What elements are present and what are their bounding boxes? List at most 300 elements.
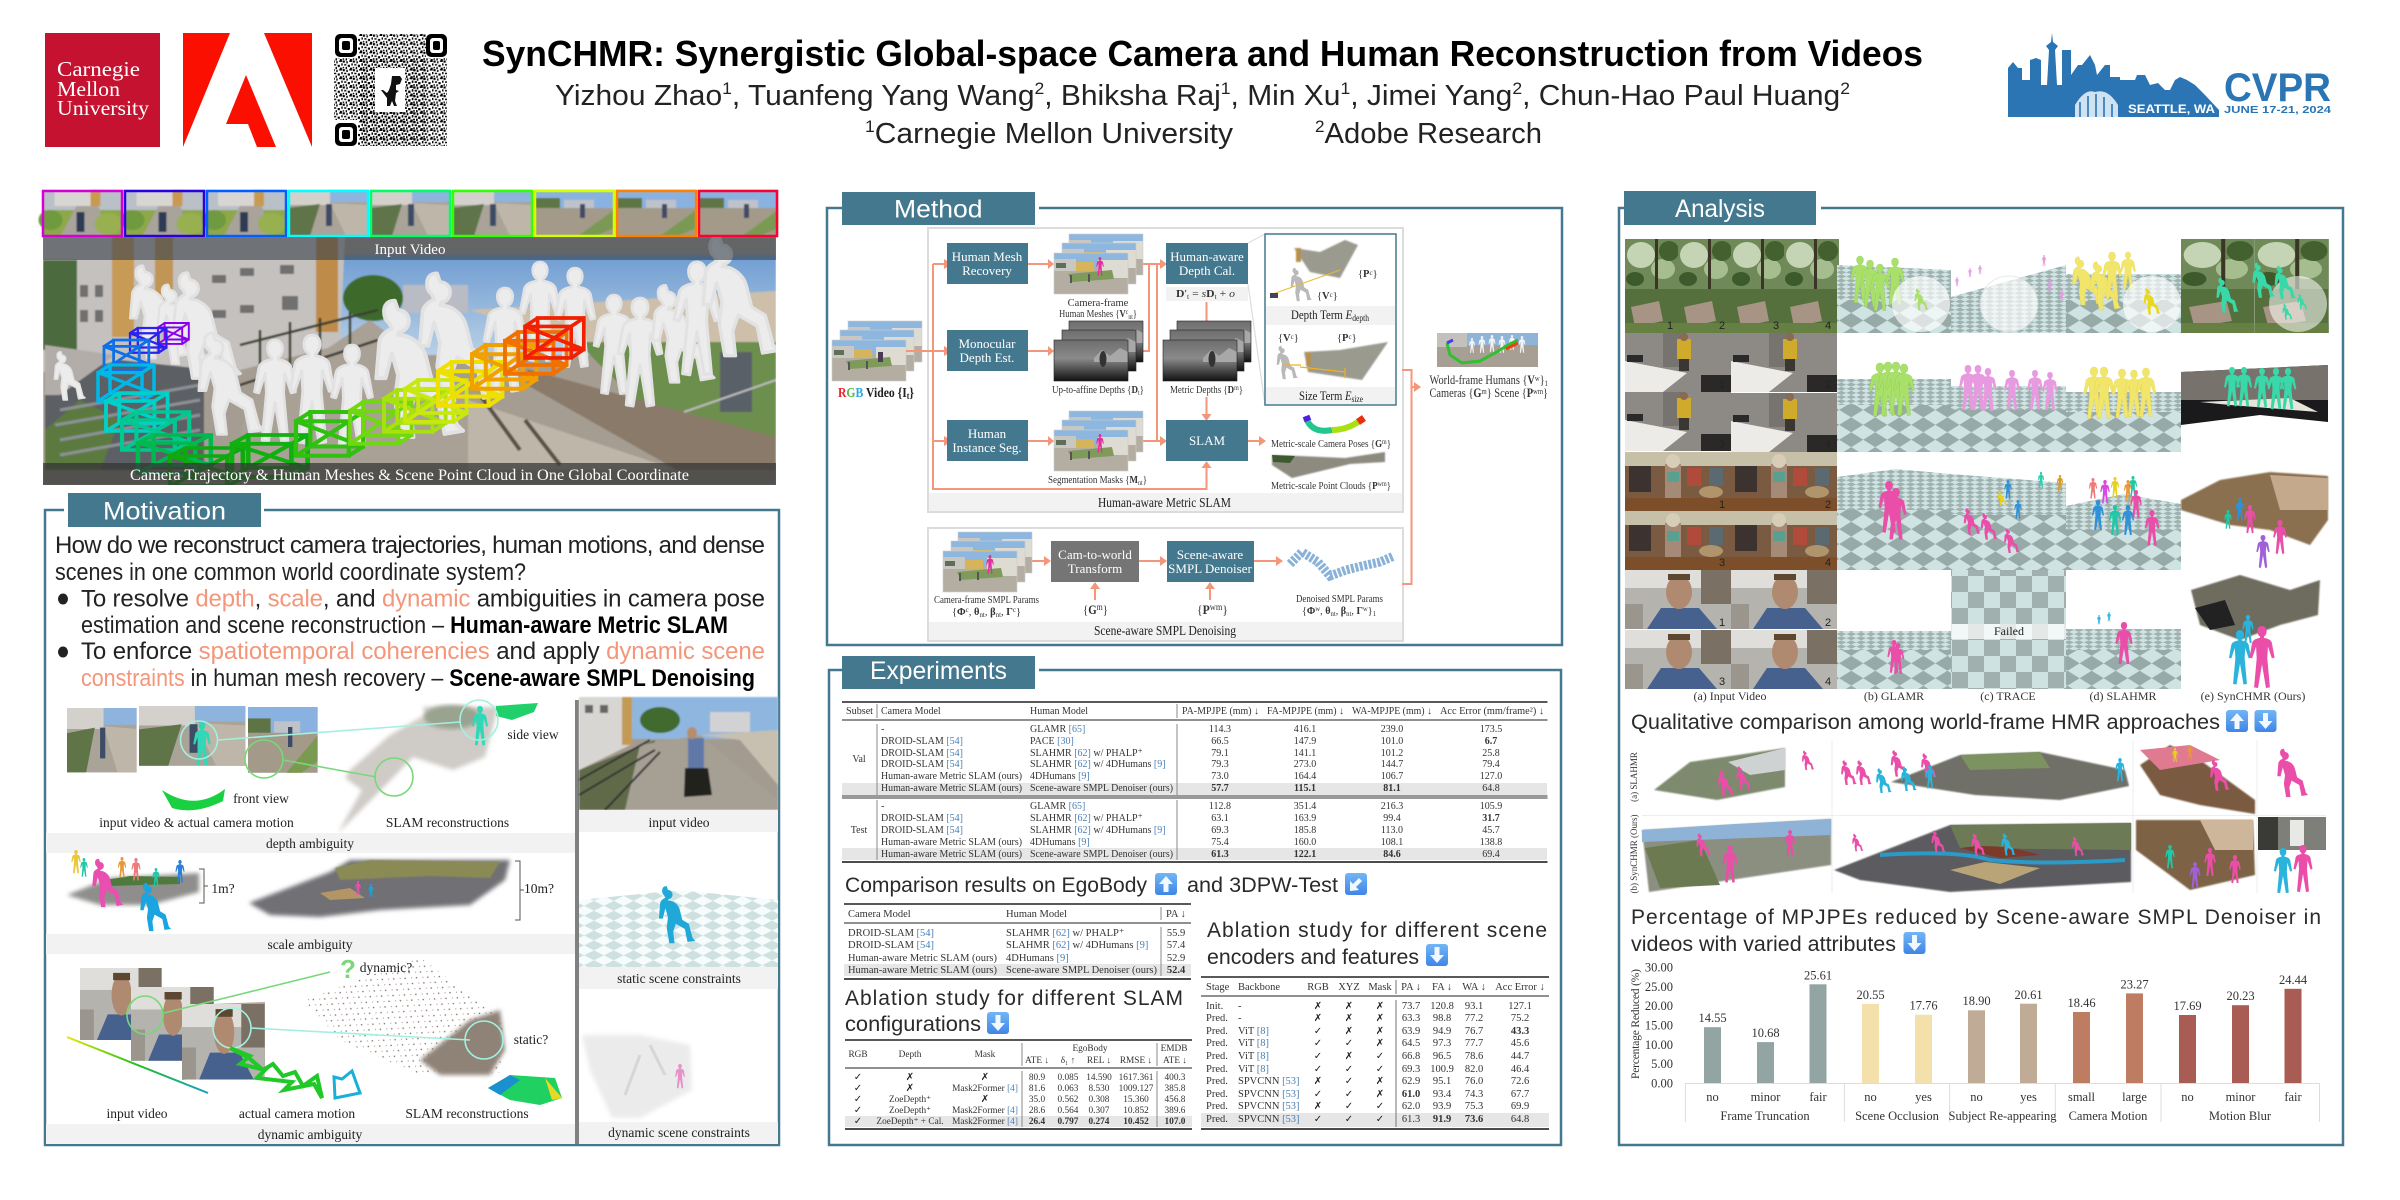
table: ablation scene encoders and features [1201,977,1549,1129]
table: EgoBody and 3DPW comparison: Subset [846,706,873,717]
camera and scene inputs: } [1103,603,1108,617]
table: ablation scene encoders and features: 77.2 [1465,1013,1483,1024]
table: ablation SLAM configurations: ✓ [854,1072,862,1083]
dynamic ambiguity illustration: dynamic? [360,960,412,975]
table: ablation scene encoders and features: ViT [8] [1238,1026,1269,1037]
bar chart: percentage of MPJPEs reduced: 5.00 [1651,1057,1673,1071]
bar chart: percentage of MPJPEs reduced: 14.55 [1698,1011,1727,1025]
table: ablation scene encoders and features: 97.3 [1433,1038,1451,1049]
table: ablation SLAM configurations: Mask2Former [4] [952,1084,1018,1094]
SMPL params stack: Camera-frame SMPL Params [934,595,1039,606]
table: ablation scene encoders and features: Pred. [1206,1013,1228,1024]
SMPL params stack: β [990,607,996,618]
table: SLAM models on PA: Scene-aware SMPL Denoiser (ours) [1006,965,1157,976]
table: SLAM models on PA: Human Model [1006,909,1067,920]
input video column: 3 [1719,557,1725,569]
table: ablation scene encoders and features: ✓ [1345,1114,1353,1125]
authors: , Chun-Hao Paul Huang [1522,80,1840,112]
bar chart: percentage of MPJPEs reduced [1630,960,2320,1123]
authors: Yizhou Zhao [555,80,717,112]
table: ablation scene encoders and features: ✗ [1314,1013,1322,1024]
table: EgoBody and 3DPW comparison: 216.3 [1381,801,1403,812]
table: EgoBody and 3DPW comparison: 351.4 [1294,801,1316,812]
denoised SMPL params: nt [1330,610,1336,618]
caption: scale ambiguity [46,934,575,954]
table: ablation scene encoders and features: 69.9 [1511,1101,1529,1112]
bar chart: percentage of MPJPEs reduced: Scene Occlusion [1855,1109,1940,1123]
block: Scene-aware SMPL Denoising: Scene-aware SMPL Denoising [1094,623,1236,638]
hero: camera trajectory, human meshes and scene point cloud: Camera Trajectory & Human Meshes & Scene Point Cloud in One Global Coordinate [130,467,689,484]
bar chart: percentage of MPJPEs reduced: 15.00 [1645,1018,1673,1032]
heading: ablation scene encoders [1207,919,1547,969]
table: ablation SLAM configurations: ATE ↓ [1025,1056,1049,1066]
table: ablation scene encoders and features: 93.9 [1433,1101,1451,1112]
denoised SMPL params: , [1351,606,1356,617]
bar chart: percentage of MPJPEs reduced: yes [2020,1090,2037,1104]
depth and size term detail [1248,234,1396,405]
table: ablation scene encoders and features: 64.5 [1402,1038,1420,1049]
input video column: 1 [1719,499,1725,511]
table: ablation scene encoders and features: 46.4 [1511,1064,1530,1075]
table: SLAM models on PA: SLAHMR [62] w/ 4DHumans [9] [1006,940,1148,951]
table: SLAM models on PA: 55.9 [1167,928,1185,939]
bar chart: percentage of MPJPEs reduced: yes [1915,1090,1932,1104]
table: ablation SLAM configurations: 10.852 [1123,1106,1149,1116]
depth and size term detail: size [1351,394,1363,404]
table: ablation SLAM configurations: Depth [899,1050,922,1060]
table: ablation scene encoders and features: 94.9 [1433,1026,1451,1037]
table: ablation SLAM configurations: ✗ [906,1072,914,1083]
table: EgoBody and 3DPW comparison: 61.3 [1211,849,1229,860]
table: ablation scene encoders and features: 44.7 [1511,1051,1529,1062]
affiliations: 2 [1315,117,1325,136]
table: SLAM models on PA: 4DHumans [9] [1006,953,1069,964]
output: world-frame reconstruction: World-frame Humans {V [1430,373,1548,387]
table: ablation scene encoders and features: ✓ [1376,1051,1384,1062]
table: ablation scene encoders and features: WA ↓ [1462,982,1486,993]
heading: ablation scene encoders: Ablation study for different scene [1207,919,1547,942]
depth and size term detail: Size Term E [1299,388,1353,403]
table: ablation scene encoders and features: SPVCNN [53] [1238,1089,1300,1100]
input video column: 4 [1825,557,1831,569]
heading: ablation SLAM: Ablation study for different SLAM [845,987,1183,1010]
image stack: metric depths: } [1239,385,1243,396]
output: world-frame reconstruction [1430,333,1548,400]
depth and size term detail: } [1352,333,1357,344]
table: ablation scene encoders and features: 62.0 [1402,1101,1420,1112]
bar chart: percentage of MPJPEs reduced: 17.69 [2173,999,2202,1013]
affiliations: Adobe Research [1325,118,1542,150]
table: ablation SLAM configurations: ✗ [981,1072,989,1083]
arrows [906,264,1419,600]
heading: qualitative comparison: Qualitative comparison among world-frame HMR approaches [1631,711,2220,734]
table: ablation scene encoders and features: ✓ [1345,1064,1353,1075]
table: EgoBody and 3DPW comparison: Human-aware Metric SLAM (ours) [881,783,1022,794]
image stack: depths: } [1140,385,1144,396]
table: ablation scene encoders and features: SPVCNN [53] [1238,1114,1300,1125]
step: Human Mesh Recovery: Recovery [962,263,1012,278]
motivation text: To enforce spatiotemporal coherencies and apply dynamic scene [81,638,765,665]
table: ablation scene encoders and features: 120.8 [1430,1001,1454,1012]
table: ablation SLAM configurations: 0.562 [1058,1095,1079,1105]
table: EgoBody and 3DPW comparison: DROID-SLAM [54] [881,736,963,747]
table: EgoBody and 3DPW comparison: 75.4 [1211,837,1229,848]
table: ablation SLAM configurations: 80.9 [1029,1073,1045,1083]
table: ablation scene encoders and features: Pred. [1206,1076,1228,1087]
denoised SMPL params: Γ [1356,606,1363,617]
table: ablation SLAM configurations: 456.8 [1165,1095,1186,1105]
input video column: 1 [1719,379,1725,391]
table: EgoBody and 3DPW comparison: SLAHMR [62] w/ PHALP⁺ [1030,748,1143,759]
table: ablation SLAM configurations: ZoeDepth⁺ + Cal. [876,1117,944,1127]
table: ablation scene encoders and features: 78.6 [1465,1051,1483,1062]
table: ablation scene encoders and features: ✗ [1376,1001,1384,1012]
table: ablation SLAM configurations [845,1040,1192,1129]
global reconstruction comparison: (a) SLAHMR [1629,752,1639,802]
table: ablation scene encoders and features: SPVCNN [53] [1238,1076,1300,1087]
SMPL params stack: } [1016,607,1021,618]
heading: percentage reduced: Percentage of MPJPEs reduced by Scene-aware SMPL Denoiser in [1631,906,2321,929]
table: ablation scene encoders and features: 98.8 [1433,1013,1451,1024]
depth and size term detail: c [1348,333,1352,341]
table: ablation scene encoders and features: 95.1 [1433,1076,1451,1087]
depth and size term detail: depth [1352,313,1369,323]
input video photo and caption [579,697,778,832]
RGB video input: } [909,385,914,400]
image stack: depths: t [1138,389,1140,397]
table: ablation scene encoders and features: ✗ [1345,1001,1353,1012]
table: ablation scene encoders and features: 91.9 [1433,1114,1451,1125]
SMPL params stack: , [969,607,974,618]
table: ablation scene encoders and features: ✗ [1376,1038,1384,1049]
table: ablation scene encoders and features: 63.9 [1402,1026,1420,1037]
bar chart: percentage of MPJPEs reduced: 18.46 [2067,996,2096,1010]
table: ablation SLAM configurations: 28.6 [1029,1106,1045,1116]
SMPL params stack: θ [974,607,980,618]
image stack: segmentation masks: nt [1138,479,1143,487]
bar chart: percentage of MPJPEs reduced: Subject Re-appearing [1949,1109,2057,1123]
table: EgoBody and 3DPW comparison: Human-aware Metric SLAM (ours) [881,771,1022,782]
table: EgoBody and 3DPW comparison: DROID-SLAM [54] [881,759,963,770]
dynamic scene constraints [579,1035,778,1144]
logo: CVPR 2024 Seattle: JUNE 17-21, 2024 [2224,104,2331,116]
step: Human Instance Seg.: Instance Seg. [952,440,1022,455]
dynamic ambiguity illustration: ? [340,954,356,984]
table: ablation scene encoders and features: ✓ [1376,1064,1384,1075]
depth calibration formula: t [1187,293,1189,301]
authors: 2 [1512,79,1522,98]
table: ablation scene encoders and features: 66.8 [1402,1051,1420,1062]
panel: Experiments [829,656,1561,1145]
block: Scene-aware SMPL Denoising [928,528,1403,641]
table: ablation scene encoders and features: ✓ [1345,1101,1353,1112]
motivation text: constraints in human mesh recovery – Scene-aware SMPL Denoising [81,665,755,692]
hero: camera trajectory, human meshes and scene point cloud: Input Video [375,242,445,258]
table: ablation scene encoders and features: 45.6 [1511,1038,1529,1049]
camera and scene inputs: {G [1083,603,1098,617]
table: ablation SLAM configurations: ZoeDepth⁺ [889,1106,931,1116]
table: ablation scene encoders and features: Pred. [1206,1051,1228,1062]
image stack: segmentation masks: Segmentation Masks {M [1048,475,1143,486]
table: SLAM models on PA: Camera Model [848,909,911,920]
table: EgoBody and 3DPW comparison: 138.8 [1480,837,1502,848]
table: ablation scene encoders and features: ✓ [1314,1064,1322,1075]
table: EgoBody and 3DPW comparison: 81.1 [1383,783,1401,794]
table: EgoBody and 3DPW comparison: Human Model [1030,706,1088,717]
caption: depth ambiguity: depth ambiguity [266,836,354,851]
table: ablation scene encoders and features: Backbone [1238,982,1280,993]
table: SLAM models on PA [844,904,1191,979]
heading: Method [842,192,1035,225]
table: ablation scene encoders and features: 43.3 [1511,1026,1529,1037]
table: ablation SLAM configurations: ✓ [854,1105,862,1116]
denoised SMPL params: , [1336,606,1341,617]
authors: 2 [1840,79,1850,98]
table: SLAM models on PA: Human-aware Metric SLAM (ours) [848,953,997,964]
table: ablation SLAM configurations: 81.6 [1029,1084,1045,1094]
table: ablation SLAM configurations: 0.063 [1058,1084,1079,1094]
table: ablation scene encoders and features: Pred. [1206,1114,1228,1125]
table: ablation SLAM configurations: ✗ [906,1083,914,1094]
table: ablation scene encoders and features: PA ↓ [1401,982,1421,993]
depth calibration formula: sD [1202,289,1214,300]
table: ablation scene encoders and features: - [1238,1001,1242,1012]
table: ablation scene encoders and features: 96.5 [1433,1051,1451,1062]
camera and scene inputs: wm [1210,602,1222,612]
table: SLAM models on PA: DROID-SLAM [54] [848,928,934,939]
denoised SMPL params: w [1363,605,1369,613]
camera and scene inputs [1083,602,1228,617]
caption: depth ambiguity [46,833,575,853]
dynamic scene constraints: dynamic scene constraints [608,1125,750,1140]
SMPL params stack: {Φ [952,607,966,618]
denoised SMPL params: {Φ [1302,606,1316,617]
logo: CVPR 2024 Seattle [2008,33,2331,117]
table: EgoBody and 3DPW comparison: 45.7 [1482,825,1500,836]
table: ablation scene encoders and features: 100.9 [1430,1064,1454,1075]
table: ablation SLAM configurations: 0.307 [1089,1106,1110,1116]
table: ablation SLAM configurations: 14.590 [1086,1073,1112,1083]
table: EgoBody and 3DPW comparison: 69.4 [1482,849,1500,860]
table: ablation scene encoders and features: Stage [1206,982,1230,993]
image stack: metric depths: m [1234,384,1239,392]
table: ablation scene encoders and features: ✗ [1345,1013,1353,1024]
table: EgoBody and 3DPW comparison: PACE [30] [1030,736,1074,747]
output: world-frame reconstruction: m [1482,387,1487,396]
table: ablation SLAM configurations: 0.797 [1058,1117,1079,1127]
table: ablation SLAM configurations: 1009.127 [1119,1084,1154,1094]
table: ablation scene encoders and features: ✗ [1376,1026,1384,1037]
table: ablation SLAM configurations: REL ↓ [1087,1056,1111,1066]
column captions: (d) SLAHMR [2089,689,2157,703]
table: ablation scene encoders and features: FA ↓ [1432,982,1452,993]
global reconstruction comparison [1629,740,2326,894]
table: ablation SLAM configurations: 1617.361 [1119,1073,1154,1083]
table: EgoBody and 3DPW comparison: 101.0 [1381,736,1403,747]
heading: Analysis: Analysis [1675,195,1765,223]
qualitative comparison grid [1625,239,2329,703]
depth calibration formula: = [1189,289,1202,300]
input video frame strip [38,190,778,236]
image stack: human meshes [1054,234,1143,321]
scale ambiguity illustration: 1m? [211,881,235,896]
table: ablation scene encoders and features: ✓ [1314,1114,1322,1125]
image stack: segmentation masks: } [1143,475,1147,486]
table: EgoBody and 3DPW comparison: 108.1 [1381,837,1403,848]
depth ambiguity illustration: input video & actual camera motion [99,815,294,830]
table: SLAM models on PA: 52.9 [1167,953,1185,964]
image stack: segmentation masks [1048,411,1147,487]
depth and size term detail: c [1369,269,1373,277]
logo: CVPR 2024 Seattle: CVPR [2224,66,2331,110]
logo: Carnegie Mellon University [45,33,160,147]
panel: Analysis [1619,191,2343,1145]
step: Human-aware Depth Cal.: Depth Cal. [1179,263,1235,278]
scale ambiguity illustration [67,850,554,931]
heading: comparison results [845,873,1367,897]
table: EgoBody and 3DPW comparison: Val [852,754,866,765]
QR code [334,34,447,146]
table: EgoBody and 3DPW comparison: 114.3 [1209,724,1231,735]
dynamic ambiguity illustration: input video [106,1106,168,1121]
table: ablation SLAM configurations: EMDB [1161,1044,1187,1054]
metric-scale camera poses: } [1387,439,1391,450]
heading: Analysis [1624,191,1816,225]
table: ablation scene encoders and features: 72.6 [1511,1076,1529,1087]
scale ambiguity illustration: 10m? [524,881,554,896]
table: EgoBody and 3DPW comparison: 122.1 [1294,849,1316,860]
bar chart: percentage of MPJPEs reduced: small [2068,1090,2096,1104]
arrowheads [944,259,1421,589]
table: ablation scene encoders and features: ✓ [1314,1026,1322,1037]
authors: 1 [722,79,732,98]
bar chart: percentage of MPJPEs reduced: 20.55 [1856,988,1885,1002]
block: Human-aware Metric SLAM: Human-aware Metric SLAM [1098,495,1231,510]
step: Human Instance Seg. [947,420,1028,461]
RGB video input: t [907,391,909,401]
table: ablation SLAM configurations: 400.3 [1165,1073,1186,1083]
table: EgoBody and 3DPW comparison: - [881,724,884,735]
authors: , Jimei Yang [1350,80,1512,112]
caption: scale ambiguity: scale ambiguity [267,937,353,952]
motivation text: To resolve depth, scale, and dynamic ambiguities in camera pose [81,586,765,612]
metric-scale camera poses: Metric-scale Camera Poses {G [1271,439,1393,450]
input video column: 4 [1825,439,1831,451]
dynamic ambiguity illustration: actual camera motion [239,1106,355,1121]
static scene constraints [579,886,778,989]
table: EgoBody and 3DPW comparison: Test [851,825,867,836]
authors: 1 [1221,79,1231,98]
table: EgoBody and 3DPW comparison: DROID-SLAM [54] [881,825,963,836]
table: EgoBody and 3DPW comparison: 79.1 [1211,748,1229,759]
TRACE column: Failed [1994,624,2024,638]
denoised SMPL params: θ [1325,606,1331,617]
motivation text: estimation and scene reconstruction – Human-aware Metric SLAM [81,612,728,639]
bar chart: percentage of MPJPEs reduced: fair [2284,1090,2303,1104]
table: SLAM models on PA: DROID-SLAM [54] [848,940,934,951]
depth and size term detail: {P [1358,269,1369,280]
table: EgoBody and 3DPW comparison: 63.1 [1211,813,1229,824]
camera and scene inputs: } [1222,603,1228,617]
metric-scale camera poses: m [1382,438,1387,446]
step: SLAM: SLAM [1189,433,1225,448]
table: EgoBody and 3DPW comparison: GLAMR [65] [1030,724,1085,735]
table: EgoBody and 3DPW comparison: 173.5 [1480,724,1502,735]
metric-scale point clouds [1271,452,1391,492]
table: ablation scene encoders and features: ✓ [1345,1038,1353,1049]
table: EgoBody and 3DPW comparison: 99.4 [1383,813,1401,824]
table: ablation scene encoders and features: ✓ [1376,1101,1384,1112]
table: ablation scene encoders and features: ViT [8] [1238,1038,1269,1049]
step: Human Mesh Recovery: Human Mesh [952,249,1023,264]
bar chart: percentage of MPJPEs reduced: no [1864,1090,1877,1104]
input video column: 1 [1719,617,1725,629]
heading: Experiments: Experiments [870,657,1007,685]
table: EgoBody and 3DPW comparison: 147.9 [1294,736,1316,747]
depth and size term detail: } [1294,333,1299,344]
table: ablation scene encoders and features: ✗ [1314,1101,1322,1112]
table: EgoBody and 3DPW comparison: 185.8 [1294,825,1316,836]
table: ablation scene encoders and features: - [1238,1013,1242,1024]
bar chart: percentage of MPJPEs reduced: 24.44 [2279,973,2308,987]
table: ablation SLAM configurations: Mask2Former [4] [952,1106,1018,1116]
logo: Adobe [183,33,312,147]
table: EgoBody and 3DPW comparison: 79.4 [1482,759,1500,770]
input video column: 3 [1719,439,1725,451]
authors: , Min Xu [1231,80,1340,112]
denoised SMPL params: Denoised SMPL Params [1296,594,1383,605]
table: ablation scene encoders and features: ✓ [1376,1114,1384,1125]
table: ablation scene encoders and features: ✓ [1314,1038,1322,1049]
table: ablation scene encoders and features: 75.3 [1465,1101,1483,1112]
bar chart: percentage of MPJPEs reduced: Frame Truncation [1720,1109,1810,1123]
affiliations [865,117,1542,150]
input video column: 2 [1825,379,1831,391]
dynamic ambiguity illustration: SLAM reconstructions [405,1106,529,1121]
table: EgoBody and 3DPW comparison: SLAHMR [62] w/ 4DHumans [9] [1030,825,1166,836]
table: ablation scene encoders and features: 62.9 [1402,1076,1420,1087]
gray divider [575,700,579,1144]
metric-scale point clouds: wm [1378,480,1387,488]
table: EgoBody and 3DPW comparison: - [881,801,884,812]
table: ablation scene encoders and features: 93.1 [1465,1001,1483,1012]
depth and size term detail: c [1330,291,1333,299]
table: ablation SLAM configurations: RMSE ↓ [1120,1056,1152,1066]
bar chart: percentage of MPJPEs reduced: Motion Blur [2209,1109,2272,1123]
camera and scene inputs: {P [1197,603,1210,617]
table: ablation scene encoders and features: 127.1 [1508,1001,1532,1012]
table: ablation SLAM configurations: 35.0 [1029,1095,1045,1105]
depth and size term detail: c [1291,333,1294,341]
heading: Method: Method [894,196,982,224]
table: EgoBody and 3DPW comparison: 79.3 [1211,759,1229,770]
table: EgoBody and 3DPW comparison: Acc Error (mm/frame²) ↓ [1440,706,1544,717]
depth calibration formula [1166,287,1248,301]
table: EgoBody and 3DPW comparison: 73.0 [1211,771,1229,782]
table: ablation scene encoders and features: ViT [8] [1238,1064,1269,1075]
table: SLAM models on PA: Human-aware Metric SLAM (ours) [848,965,997,976]
table: EgoBody and 3DPW comparison: 69.3 [1211,825,1229,836]
bar chart: percentage of MPJPEs reduced: no [1970,1090,1983,1104]
table: EgoBody and 3DPW comparison: 160.0 [1294,837,1316,848]
heading: Motivation [68,493,261,527]
step: Human Mesh Recovery [947,243,1028,284]
table: ablation SLAM configurations: ✗ [981,1094,989,1105]
image stack: human meshes: Camera-frame [1068,298,1129,309]
table: EgoBody and 3DPW comparison: 4DHumans [9] [1030,837,1090,848]
heading: comparison results: and 3DPW-Test [1187,874,1338,897]
table: ablation scene encoders and features: Pred. [1206,1026,1228,1037]
